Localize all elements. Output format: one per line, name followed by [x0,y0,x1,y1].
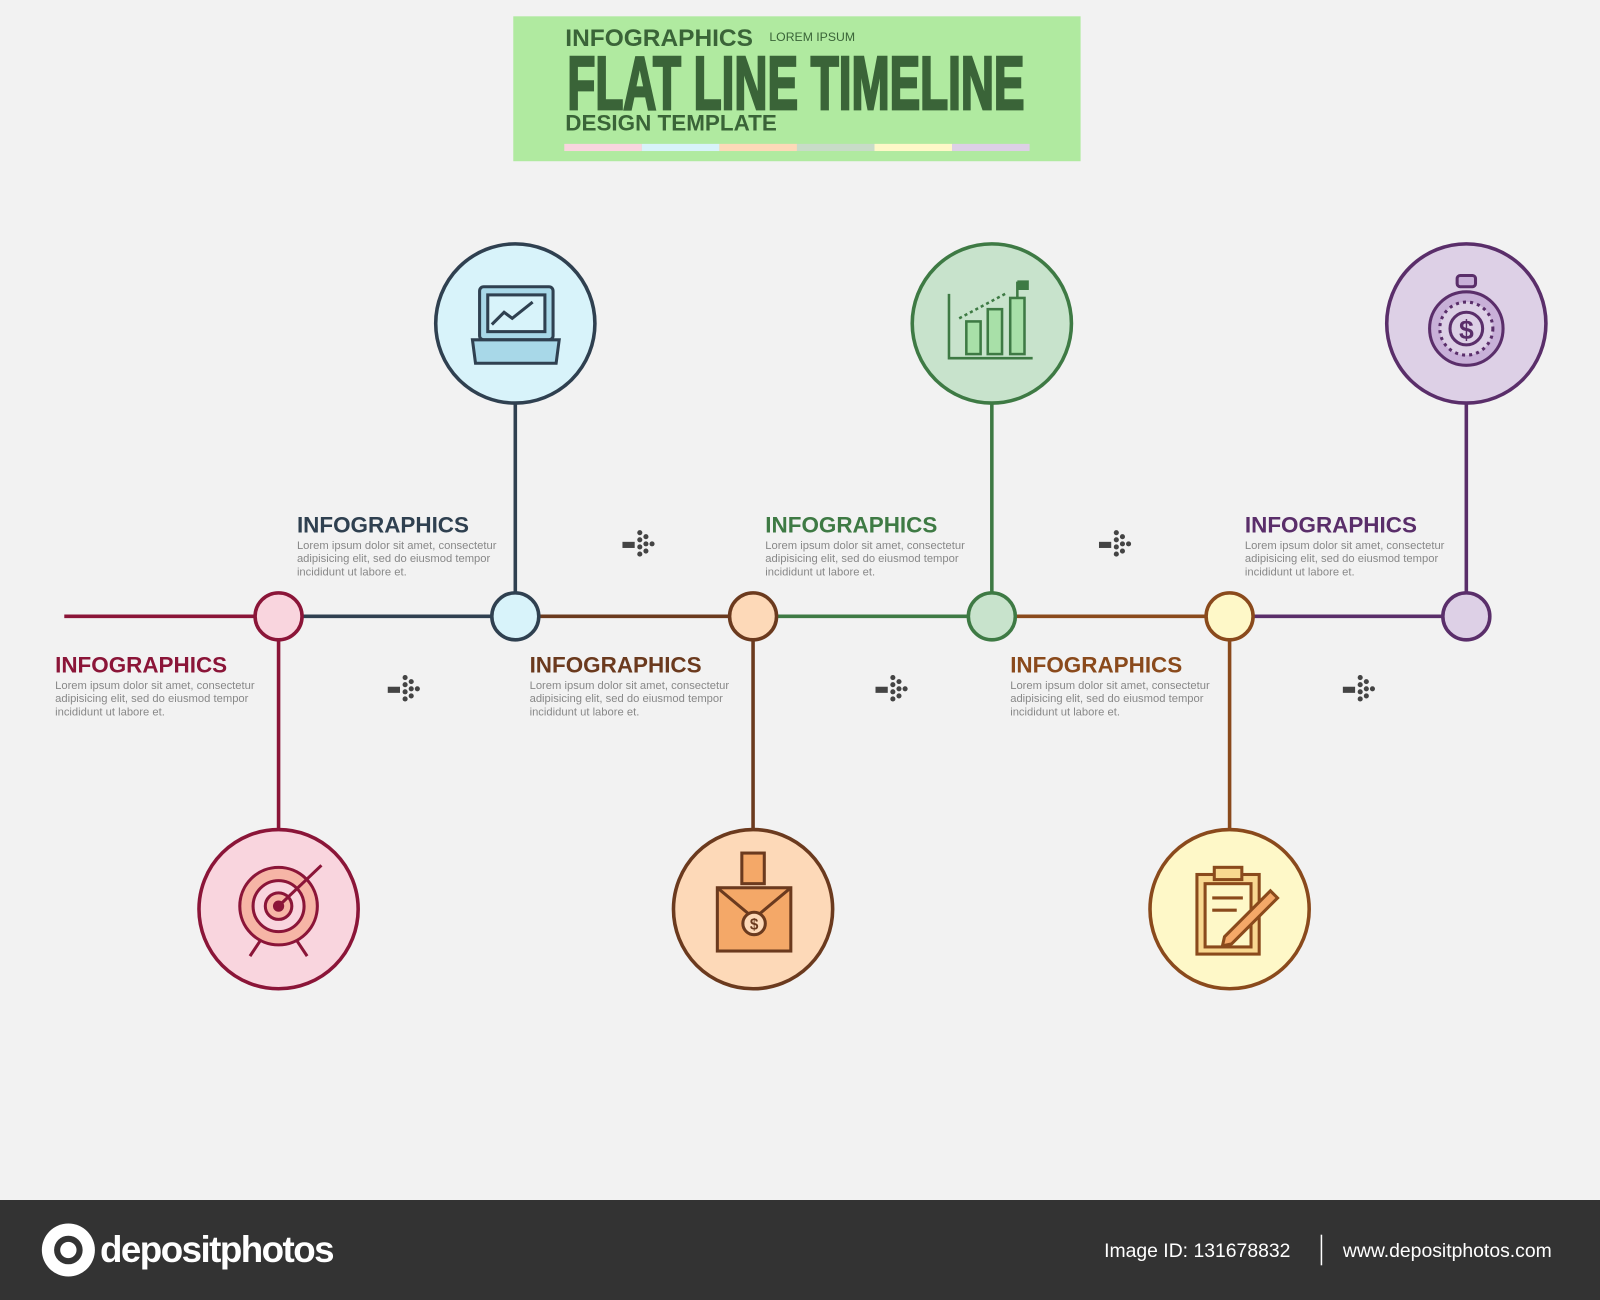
text: Lorem ipsum dolor sit amet, consectetur [530,680,729,692]
title banner: LOREM IPSUM [769,30,855,44]
step 2: laptop [436,244,595,640]
arrow 4 [1099,530,1131,557]
timeline line [64,615,1466,618]
text: Lorem ipsum dolor sit amet, consectetur [765,540,965,552]
text: INFOGRAPHICS [1245,513,1417,538]
text: INFOGRAPHICS [1010,652,1182,677]
step 3: briefcase [673,593,833,989]
text: incididunt ut labore et. [1010,706,1120,718]
text blocks: INFOGRAPHICS [55,652,227,677]
title banner: INFOGRAPHICS [565,25,753,52]
text blocks: Lorem ipsum dolor sit amet, consectetur [55,680,255,692]
text: adipisicing elit, sed do eiusmod tempor [1245,553,1438,565]
step 5: clipboard [1150,593,1309,989]
arrow 1 [388,675,420,702]
text: INFOGRAPHICS [765,513,937,538]
step 6: stopwatch [1387,244,1546,640]
arrow 3 [876,675,908,702]
arrow 5 [1343,675,1375,702]
title banner: DESIGN TEMPLATE [565,111,777,136]
text: incididunt ut labore et. [530,706,639,718]
footer bar: www.depositphotos.com [1342,1240,1552,1262]
text: adipisicing elit, sed do eiusmod tempor [765,553,959,565]
footer bar: depositphotos [100,1229,333,1270]
text: adipisicing elit, sed do eiusmod tempor [297,553,491,565]
text: Lorem ipsum dolor sit amet, consectetur [1245,540,1445,552]
text: Lorem ipsum dolor sit amet, consectetur [297,540,497,552]
step 4: chart [912,244,1071,640]
text: incididunt ut labore et. [765,567,875,579]
text blocks: adipisicing elit, sed do eiusmod tempor [55,693,249,705]
footer bar [0,1200,1600,1300]
text: INFOGRAPHICS [297,513,469,538]
step 6: stopwatch: $ [1459,315,1474,345]
text blocks: incididunt ut labore et. [55,706,165,718]
step 1: target [199,593,358,989]
step 3: briefcase: $ [750,917,759,934]
text: INFOGRAPHICS [530,652,702,677]
text: Lorem ipsum dolor sit amet, consectetur [1010,680,1210,692]
text: incididunt ut labore et. [297,567,407,579]
text: adipisicing elit, sed do eiusmod tempor [1010,693,1204,705]
text: adipisicing elit, sed do eiusmod tempor [530,693,723,705]
text blocks [55,652,255,718]
text: incididunt ut labore et. [1245,567,1355,579]
arrow 2 [622,530,655,557]
title banner: FLAT LINE TIMELINE [567,41,1024,126]
title banner [513,16,1081,161]
footer bar: Image ID: 131678832 [1104,1240,1290,1262]
